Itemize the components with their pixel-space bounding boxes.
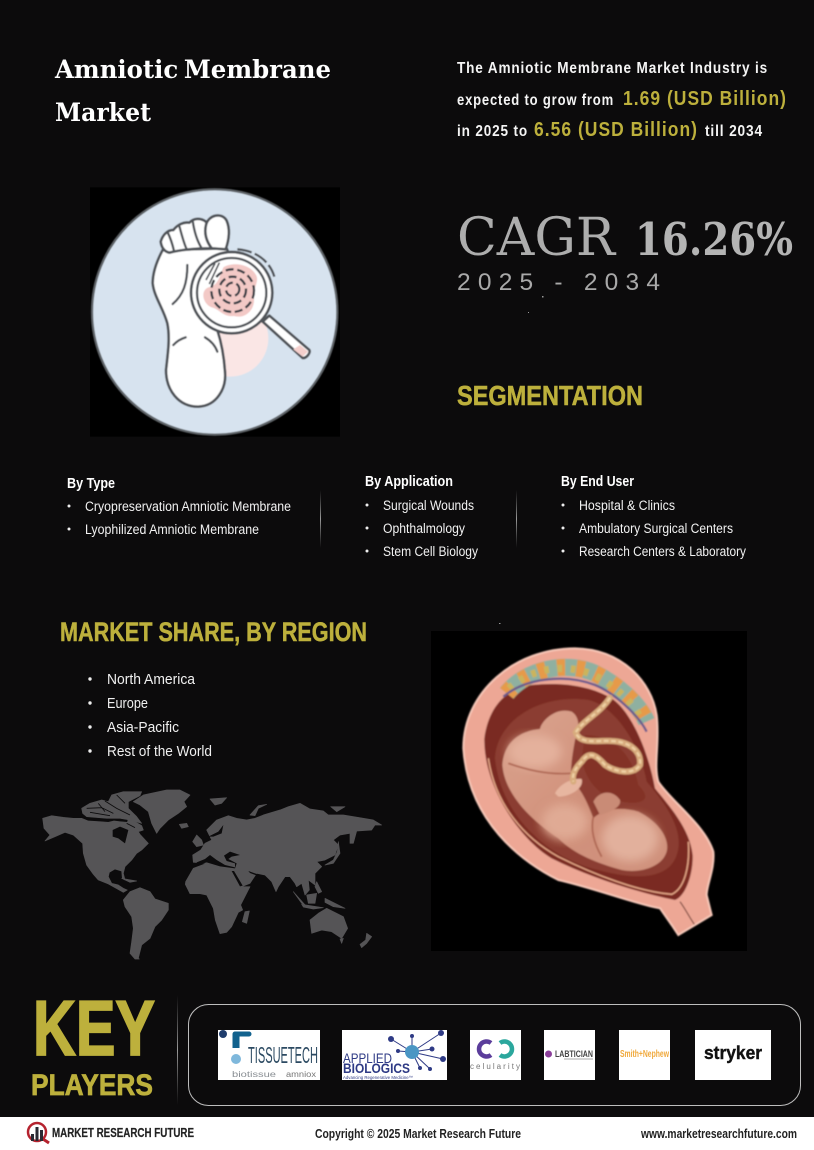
segment: by application	[365, 474, 478, 559]
logo: smith and nephew	[619, 1030, 670, 1080]
title: Amniotic Membrane	[54, 55, 331, 84]
canadian arctic islands	[82, 792, 142, 823]
heading: segmentation: SEGMENTATION	[457, 380, 643, 411]
logo: market research future	[28, 1123, 194, 1143]
segment: by type: By Type	[67, 476, 115, 492]
key players panel: TISSUETECH	[248, 1042, 318, 1068]
uterus wall	[463, 648, 714, 935]
copyright: Copyright © 2025 Market Research Future	[315, 1127, 521, 1141]
region list	[88, 671, 212, 760]
segment: by type	[67, 476, 291, 537]
cervix	[680, 902, 694, 924]
logo: tissuetech: amniox	[286, 1070, 316, 1079]
CAGR figure: CAGR	[457, 208, 617, 268]
svalbard	[210, 798, 227, 805]
logo: tissuetech	[218, 1030, 320, 1080]
logo: stryker: stryker	[704, 1043, 762, 1063]
image: foot under magnifying glass	[90, 188, 340, 436]
heading: key players: PLAYERS	[31, 1069, 153, 1102]
japan	[325, 842, 340, 865]
segment: by end user: Hospital & Clinics	[579, 498, 675, 513]
new zealand	[360, 933, 372, 948]
north america	[43, 816, 148, 892]
logo: applied biologics: BIOLOGICS	[343, 1061, 410, 1076]
market growth summary: expected to grow from	[457, 92, 614, 109]
hand	[555, 779, 582, 797]
logo: celularity: celularity	[470, 1062, 520, 1071]
segment: by end user: By End User	[561, 474, 634, 490]
footer bar	[0, 1117, 814, 1150]
region list: Europe	[107, 695, 148, 712]
segment: by end user: Research Centers & Laboratory	[579, 544, 746, 559]
segment: by end user	[561, 474, 746, 559]
world map	[42, 790, 382, 960]
eurasia	[193, 803, 382, 895]
logo: market research future: MARKET RESEARCH FUTURE	[52, 1126, 194, 1140]
cuba	[122, 878, 137, 882]
cavity	[484, 684, 693, 900]
market growth summary: till 2034	[705, 123, 763, 140]
segment: by application: Ophthalmology	[383, 521, 465, 536]
heading: key players: KEY	[33, 984, 155, 1072]
novaya zemlya	[250, 804, 267, 816]
lens	[191, 252, 272, 333]
iceland	[179, 823, 188, 828]
segment: by application: Surgical Wounds	[383, 498, 474, 513]
market growth summary: The Amniotic Membrane Market Industry is	[457, 60, 768, 77]
heading: key players	[31, 984, 155, 1102]
heading: market share by region: MARKET SHARE, BY REGION	[60, 617, 367, 647]
market growth summary	[457, 60, 787, 141]
logo: smith and nephew: Smith+Nephew	[620, 1049, 669, 1060]
logo: labtician	[544, 1030, 595, 1080]
segment: by type: Cryopreservation Amniotic Membrane	[85, 499, 291, 514]
logo: labtician: LABTICIAN	[555, 1049, 593, 1059]
title	[54, 55, 331, 127]
logo: stryker	[695, 1030, 771, 1080]
southeast asia islands	[293, 892, 307, 907]
toes	[161, 219, 212, 253]
sole	[153, 248, 240, 407]
image: fetus in womb	[431, 631, 747, 951]
madagascar	[242, 911, 249, 923]
placenta	[507, 667, 647, 722]
umbilical cord	[573, 698, 640, 782]
CAGR figure: 16.26%	[635, 213, 793, 266]
segment: by type: Lyophilized Amniotic Membrane	[85, 522, 259, 537]
amniotic sac	[495, 699, 679, 876]
logo: applied biologics	[342, 1030, 447, 1080]
region list: Rest of the World	[107, 743, 212, 760]
region list: North America	[107, 671, 196, 688]
fist	[593, 793, 620, 815]
region list: Asia-Pacific	[107, 719, 179, 736]
segment: by application: Stem Cell Biology	[383, 544, 478, 559]
logo: celularity	[470, 1030, 521, 1080]
title: Market	[55, 98, 151, 127]
CAGR figure	[457, 208, 793, 296]
africa	[185, 863, 250, 934]
market growth summary: 6.56 (USD Billion)	[534, 118, 698, 141]
handle	[263, 316, 310, 358]
key players panel	[188, 1004, 800, 1106]
south america	[123, 888, 168, 959]
CAGR figure: 2025 - 2034	[457, 269, 660, 296]
logo: applied biologics: APPLIED	[343, 1050, 392, 1066]
logo: tissuetech: biotissue	[232, 1070, 277, 1079]
logo: applied biologics: Advancing Regenerative Medicine™	[343, 1075, 413, 1080]
market growth summary: 1.69 (USD Billion)	[623, 87, 787, 110]
market growth summary: in 2025 to	[457, 123, 528, 140]
britain	[193, 835, 203, 847]
australia	[310, 908, 348, 938]
seas	[113, 825, 259, 886]
fetus body	[502, 711, 667, 871]
segment: by end user: Ambulatory Surgical Centers	[579, 521, 733, 536]
segment: by application: By Application	[365, 474, 453, 490]
greenland	[133, 790, 190, 833]
specks	[499, 296, 544, 624]
